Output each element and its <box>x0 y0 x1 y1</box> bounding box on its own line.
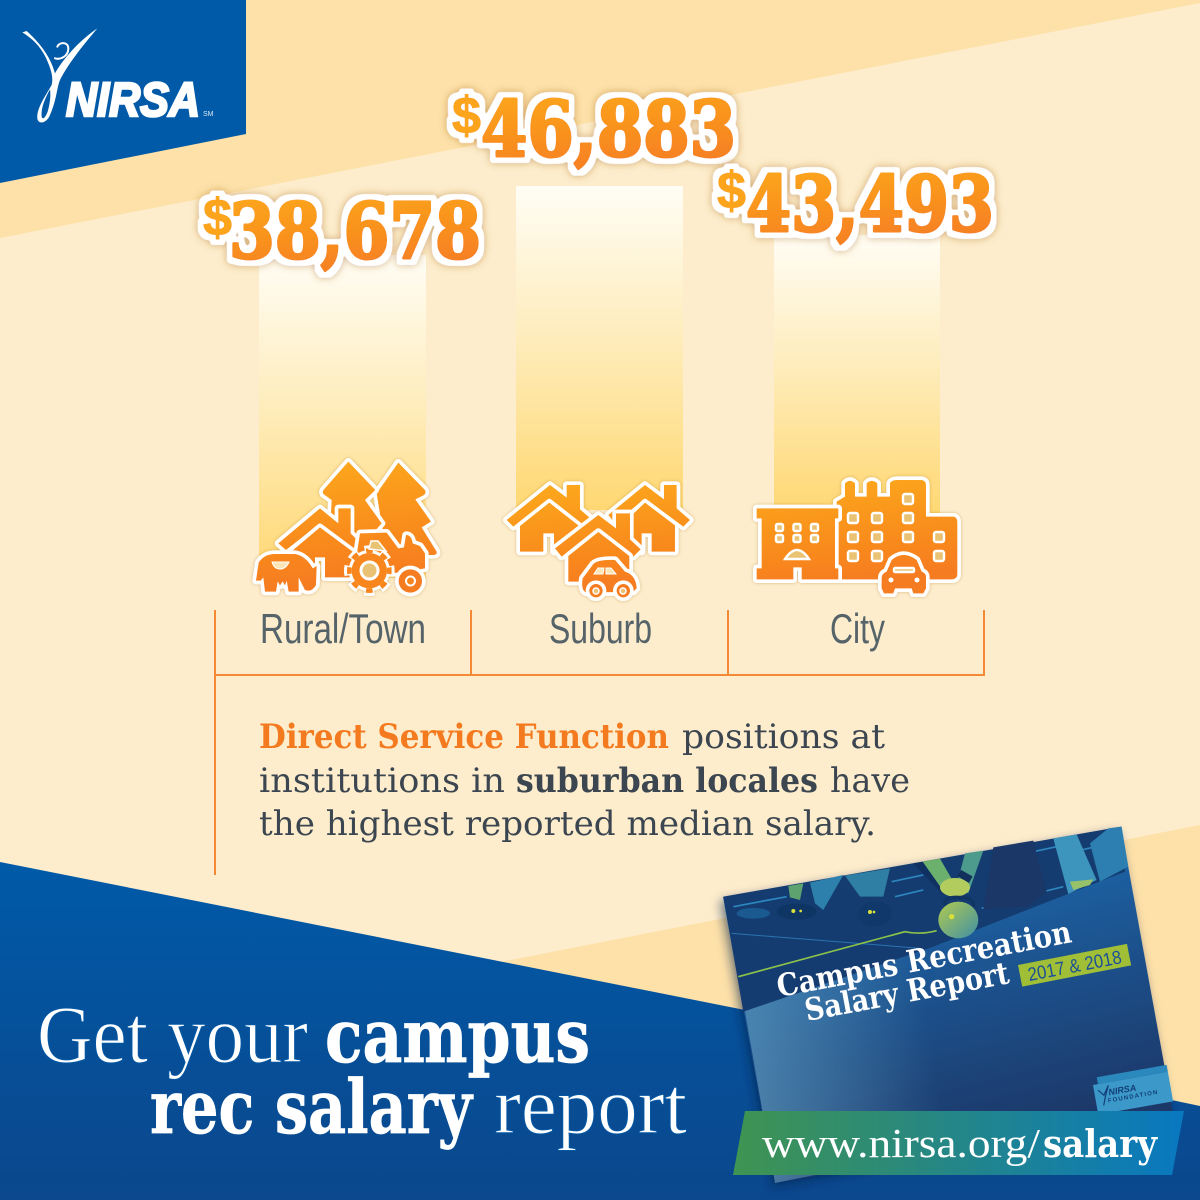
icon: middle house roof <box>555 513 641 557</box>
icon: left house roof <box>507 485 589 527</box>
shoe highlights <box>791 909 954 919</box>
blue floor line <box>732 933 920 948</box>
text block: key finding: the highest reported median salary. <box>259 804 876 844</box>
book body <box>723 827 1173 1183</box>
value: Rural/Town salary: 38,678 <box>229 187 481 277</box>
url text: light: www.nirsa.org/ <box>762 1120 1041 1166</box>
icon: right tree <box>377 463 437 555</box>
cover photo band <box>723 827 1128 1012</box>
icon: tractor front wheel <box>399 569 422 593</box>
shoes <box>777 904 817 920</box>
icon: taxi <box>882 555 926 593</box>
stripes <box>733 845 1103 908</box>
report cover <box>723 827 1173 1183</box>
text block: key finding <box>259 717 910 844</box>
icon: tractor body <box>357 533 425 573</box>
kettlebell <box>938 902 978 938</box>
icon: middle house body <box>568 532 629 582</box>
cover year tag: 2017 & 2018 <box>1026 947 1123 986</box>
value: Suburb salary: $ <box>452 87 481 145</box>
label: Rural/Town: Rural/Town <box>260 605 426 652</box>
icon: right house body <box>625 503 675 552</box>
icon: car wheel left <box>589 584 603 597</box>
icon details: city windows <box>776 494 944 582</box>
icon: cow <box>256 554 317 592</box>
icon: house roof <box>278 508 361 550</box>
url text: bold: salary <box>1043 1121 1158 1166</box>
bar: Rural/Town <box>259 255 426 578</box>
kettlebell handle <box>945 897 973 907</box>
cover foundation logo tag: FOUNDATION <box>1108 1090 1158 1105</box>
label: City: City <box>830 605 885 652</box>
icon: left tree <box>323 462 382 537</box>
heading: call to action: report <box>494 1060 687 1151</box>
icon: left house body <box>520 503 578 552</box>
watch <box>957 870 973 883</box>
icon: tractor rear wheel <box>347 549 391 593</box>
panel: bottom blue band <box>0 862 1200 1200</box>
bar: Suburb <box>516 186 683 510</box>
icon details: rural cut-outs <box>272 541 415 586</box>
green floor line <box>738 931 937 977</box>
icon: rural scene <box>256 462 437 593</box>
value: Suburb salary: 46,883 <box>481 85 736 175</box>
value: City salary: 43,493 <box>746 160 994 250</box>
logo wordmark: NIRSA <box>66 74 200 127</box>
value: Rural/Town salary: $ <box>203 189 232 247</box>
panel: logo block <box>0 0 246 183</box>
cover foundation logo tag <box>1092 1065 1173 1115</box>
category frame lines <box>215 610 985 875</box>
athlete legs <box>788 883 803 900</box>
icon: NIRSA figure <box>22 28 97 122</box>
text block: key finding: have <box>830 761 910 801</box>
icon: low building <box>757 508 838 579</box>
text block: key finding: positions at <box>682 717 885 757</box>
cover highlight <box>745 945 940 1183</box>
value: City salary: $ <box>717 162 746 220</box>
cover foundation logo tag: NIRSA <box>1108 1083 1137 1097</box>
service mark: SM <box>203 111 214 118</box>
icon: city buildings <box>757 480 957 593</box>
heading: call to action: rec salary <box>150 1065 474 1151</box>
heading: call to action <box>37 989 687 1151</box>
cover title: Campus Recreation <box>774 914 1074 1005</box>
url banner <box>733 1111 1184 1175</box>
text block: key finding: institutions in <box>259 761 505 801</box>
cover title: Salary Report <box>802 955 1013 1029</box>
heading: call to action: Get your <box>37 989 308 1080</box>
icon: car wheel right <box>617 584 630 597</box>
label: Suburb: Suburb <box>549 605 652 652</box>
hands <box>940 878 970 897</box>
cover title <box>774 914 1074 1029</box>
icon: tall building <box>837 480 957 579</box>
text block: key finding: Direct Service Function <box>259 717 669 757</box>
icon details: suburb car <box>593 568 626 594</box>
heading: call to action: campus <box>325 994 590 1080</box>
icon: car <box>582 560 637 593</box>
icon: house body <box>290 527 354 577</box>
text block: key finding: suburban locales <box>516 761 818 801</box>
icon: right house roof <box>608 485 690 527</box>
bar: City <box>774 235 940 513</box>
icon: suburb houses <box>507 485 690 597</box>
